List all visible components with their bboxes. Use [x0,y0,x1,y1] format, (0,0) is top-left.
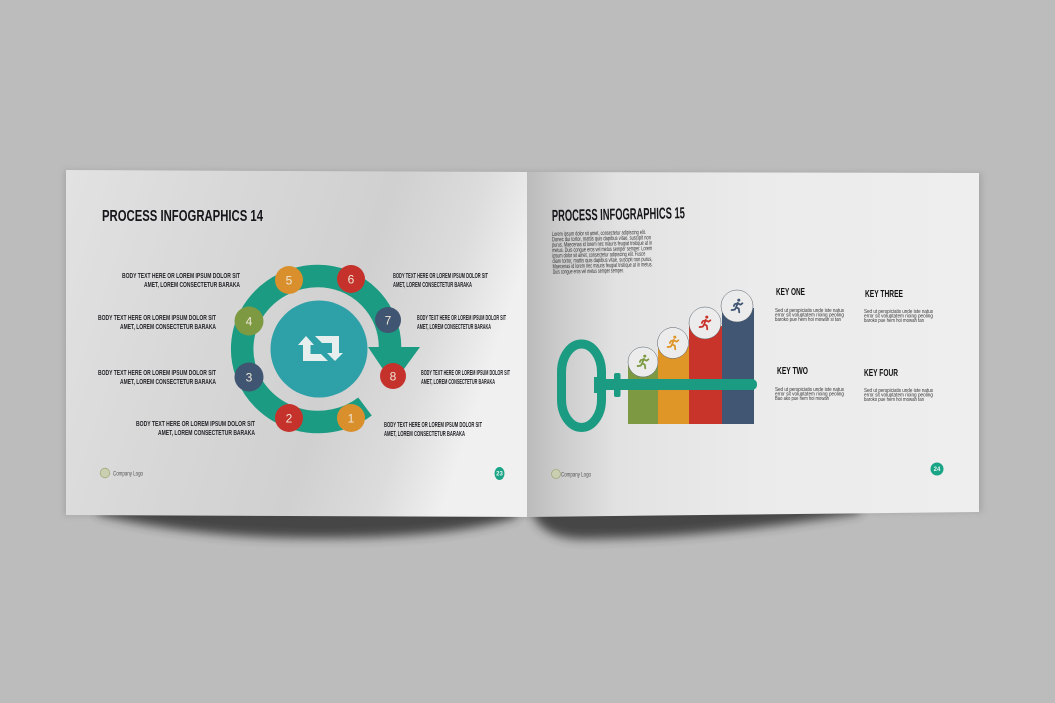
bar: orange [658,346,689,424]
shadow: left page [98,505,518,538]
intro paragraph: diam tortor, mattis quis dapibus vitae, suscipit non purus, [552,256,653,265]
label: step 8: BODY TEXT HERE OR LOREM IPSUM DOLOR SIT [421,368,510,377]
bar: blue [722,308,754,424]
intro paragraph: purus. Maecenas id lorem nec mauris feugiat tristique at in [552,240,653,249]
step 5 [275,266,303,294]
page number: 24: 24 [934,467,941,473]
bar: red [689,326,722,424]
bar: green [628,365,658,424]
key one: baroko pue hem hoi mowah si tan [775,317,841,323]
arrowhead [368,347,420,384]
label: step 2: AMET, LOREM CONSECTETUR BARAKA [158,428,255,437]
label: step 2: BODY TEXT HERE OR LOREM IPSUM DOLOR SIT [136,419,255,428]
label: step 5 [122,271,240,289]
runner badge: orange [658,328,688,358]
step 2: 2 [286,412,293,426]
key one: error sit voluptatem rioing peoling [775,312,844,318]
key one: Sed ut perspiciatis unde iste natus [775,308,844,314]
heading: process infographics 15: PROCESS INFOGRAPHICS 15 [552,205,685,225]
label: step 6: AMET, LOREM CONSECTETUR BARAKA [393,280,472,289]
step 6: 6 [348,272,355,286]
step 4 [234,306,264,336]
left page [66,170,527,517]
label: step 4: BODY TEXT HERE OR LOREM IPSUM DOLOR SIT [98,313,216,322]
label: step 2 [136,419,255,437]
ring arrow [242,276,390,422]
intro paragraph: Maecenas id lorem nec mauris feugiat tristique at in metus. [552,261,653,270]
key four: Sed ut perspiciatis unde iste natus [864,388,933,394]
label: step 7: BODY TEXT HERE OR LOREM IPSUM DOLOR SIT [417,313,506,322]
key bar chart [562,290,757,428]
key three: Sed ut perspiciatis unde iste natus [864,309,933,315]
step 8: 8 [390,370,397,384]
runner badge: red [689,307,721,339]
label: step 4: AMET, LOREM CONSECTETUR BARAKA [120,322,216,331]
step 1: 1 [348,412,355,426]
key four: error sit voluptatem rioing peoling [864,392,933,398]
label: step 1: BODY TEXT HERE OR LOREM IPSUM DOLOR SIT [384,420,482,429]
step 2 [275,404,303,432]
step 1 [337,404,365,432]
page number: 23: 23 [496,472,503,478]
shadow: page outline [64,170,982,518]
footer logo: right [552,470,591,478]
page number: 23 [494,467,504,480]
label: step 3: BODY TEXT HERE OR LOREM IPSUM DOLOR SIT [98,368,216,377]
intro paragraph: Duis congue eros vel metus semper semper. [553,267,624,276]
step 7 [375,307,401,333]
label: step 6: BODY TEXT HERE OR LOREM IPSUM DOLOR SIT [393,271,488,280]
key three: baroko pue hem hoi mowah tan [864,318,924,324]
step 3: 3 [246,370,253,384]
label: step 8: AMET, LOREM CONSECTETUR BARAKA [421,377,495,386]
circular process diagram [234,265,420,432]
step 5: 5 [286,274,293,288]
center circle [270,300,368,398]
label: step 6 [393,271,488,289]
footer logo: right: Company Logo [561,472,591,478]
key one [775,286,844,323]
step 4: 4 [246,314,253,328]
intro paragraph: metus. Duis congue eros vel metus semper semper. Lorem [552,245,652,254]
label: step 7 [417,313,506,331]
intro paragraph: Lorem ipsum dolor sit amet, consectetur adipiscing elit. [552,229,646,238]
key three [864,288,933,324]
key three: error sit voluptatem rioing peoling [864,314,933,320]
right page [527,172,979,517]
label: step 3: AMET, LOREM CONSECTETUR BARAKA [120,377,216,386]
page number: 24 [930,462,944,476]
intro paragraph [552,229,653,276]
intro paragraph: Donec dui tortor, mattis quis dapibus vitae, suscipit non [552,234,651,243]
step 3 [234,362,264,392]
key four: KEY FOUR [864,367,898,379]
runner badge: green [628,347,658,377]
key two: Sed ut perspiciatis unde iste natus [775,387,844,393]
heading: process infographics 14: PROCESS INFOGRAPHICS 14 [102,208,263,225]
key two: KEY TWO [777,365,808,377]
key shaft [594,373,757,397]
label: step 5: BODY TEXT HERE OR LOREM IPSUM DOLOR SIT [122,271,240,280]
footer logo: left [100,468,143,478]
runner badge: blue [721,290,753,322]
key two: Bao ako pue hem hoi mowah [775,396,829,402]
key two: error sit voluptatem rioing peoling [775,392,844,398]
intro paragraph: ipsum dolor sit amet, consectetur adipiscing elit. Fusce [552,251,646,260]
icon: repeat arrows [298,336,343,361]
step 6 [337,265,365,293]
label: step 3 [98,368,216,386]
step 8 [380,363,406,389]
label: step 5: AMET, LOREM CONSECTETUR BARAKA [144,280,240,289]
key four: baroko pue hem hoi mowah tan [864,397,924,403]
key three: KEY THREE [865,288,903,300]
label: step 1 [384,420,482,438]
key bow [562,344,602,428]
label: step 1: AMET, LOREM CONSECTETUR BARAKA [384,429,465,438]
label: step 7: AMET, LOREM CONSECTETUR BARAKA [417,322,491,331]
step 7: 7 [385,314,392,328]
label: step 4 [98,313,216,331]
footer logo: left: Company Logo [113,472,143,478]
key two [775,365,844,402]
label: step 8 [421,368,510,386]
key one: KEY ONE [776,286,805,298]
shadow: right page [534,505,860,539]
key four [864,367,933,403]
